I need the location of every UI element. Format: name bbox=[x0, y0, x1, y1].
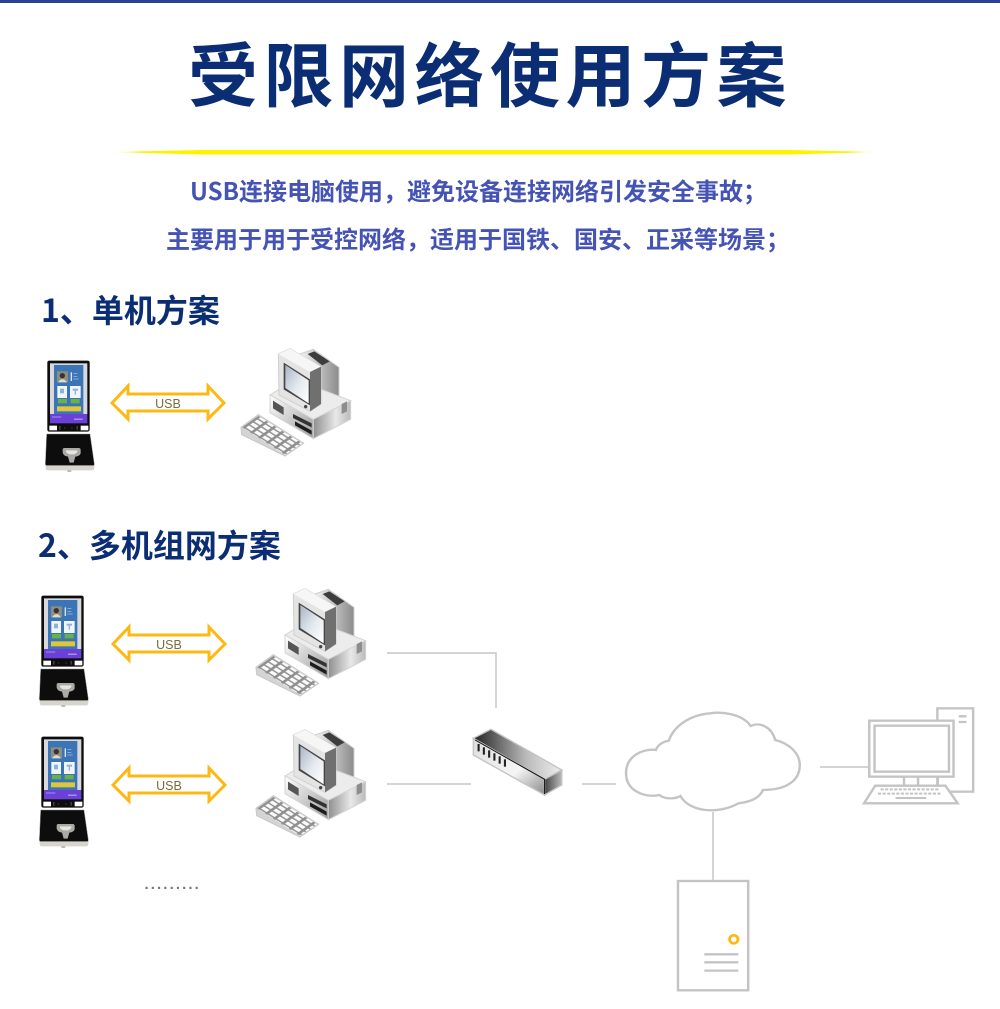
icon: computer 1 bbox=[241, 349, 351, 456]
heading: multi-machine network plan: 2、多机组网方案 bbox=[38, 521, 281, 567]
icon: desktop computer outline bbox=[864, 708, 973, 803]
heading: single-machine plan: 1、单机方案 bbox=[41, 286, 220, 332]
device: terminal 1 bbox=[45, 361, 95, 472]
arrow: USB link 1: USB bbox=[155, 397, 181, 411]
icon: computer 3 bbox=[256, 730, 366, 837]
device: terminal 3 bbox=[39, 737, 89, 848]
arrow: USB link 2 bbox=[113, 627, 225, 660]
top bar bbox=[0, 0, 1000, 3]
arrow: USB link 2: USB bbox=[156, 638, 182, 652]
arrow: USB link 3: USB bbox=[156, 779, 182, 793]
icon: network switch bbox=[473, 729, 562, 795]
title underline bbox=[110, 150, 880, 154]
icon: cloud bbox=[626, 713, 800, 810]
intro text: USB连接电脑使用，避免设备连接网络引发安全事故； bbox=[190, 172, 767, 207]
arrow: USB link 1 bbox=[112, 386, 224, 419]
icon: computer 2 bbox=[256, 589, 366, 696]
device: terminal 2 bbox=[39, 596, 89, 707]
icon: server tower bbox=[678, 881, 748, 990]
title: 受限网络使用方案 bbox=[188, 21, 792, 122]
intro text: 主要用于用于受控网络，适用于国铁、国安、正采等场景； bbox=[166, 220, 790, 255]
ellipsis: more terminals: ......... bbox=[144, 876, 201, 893]
intro text bbox=[166, 172, 790, 255]
arrow: USB link 3 bbox=[113, 768, 225, 801]
connector lines bbox=[387, 653, 868, 881]
